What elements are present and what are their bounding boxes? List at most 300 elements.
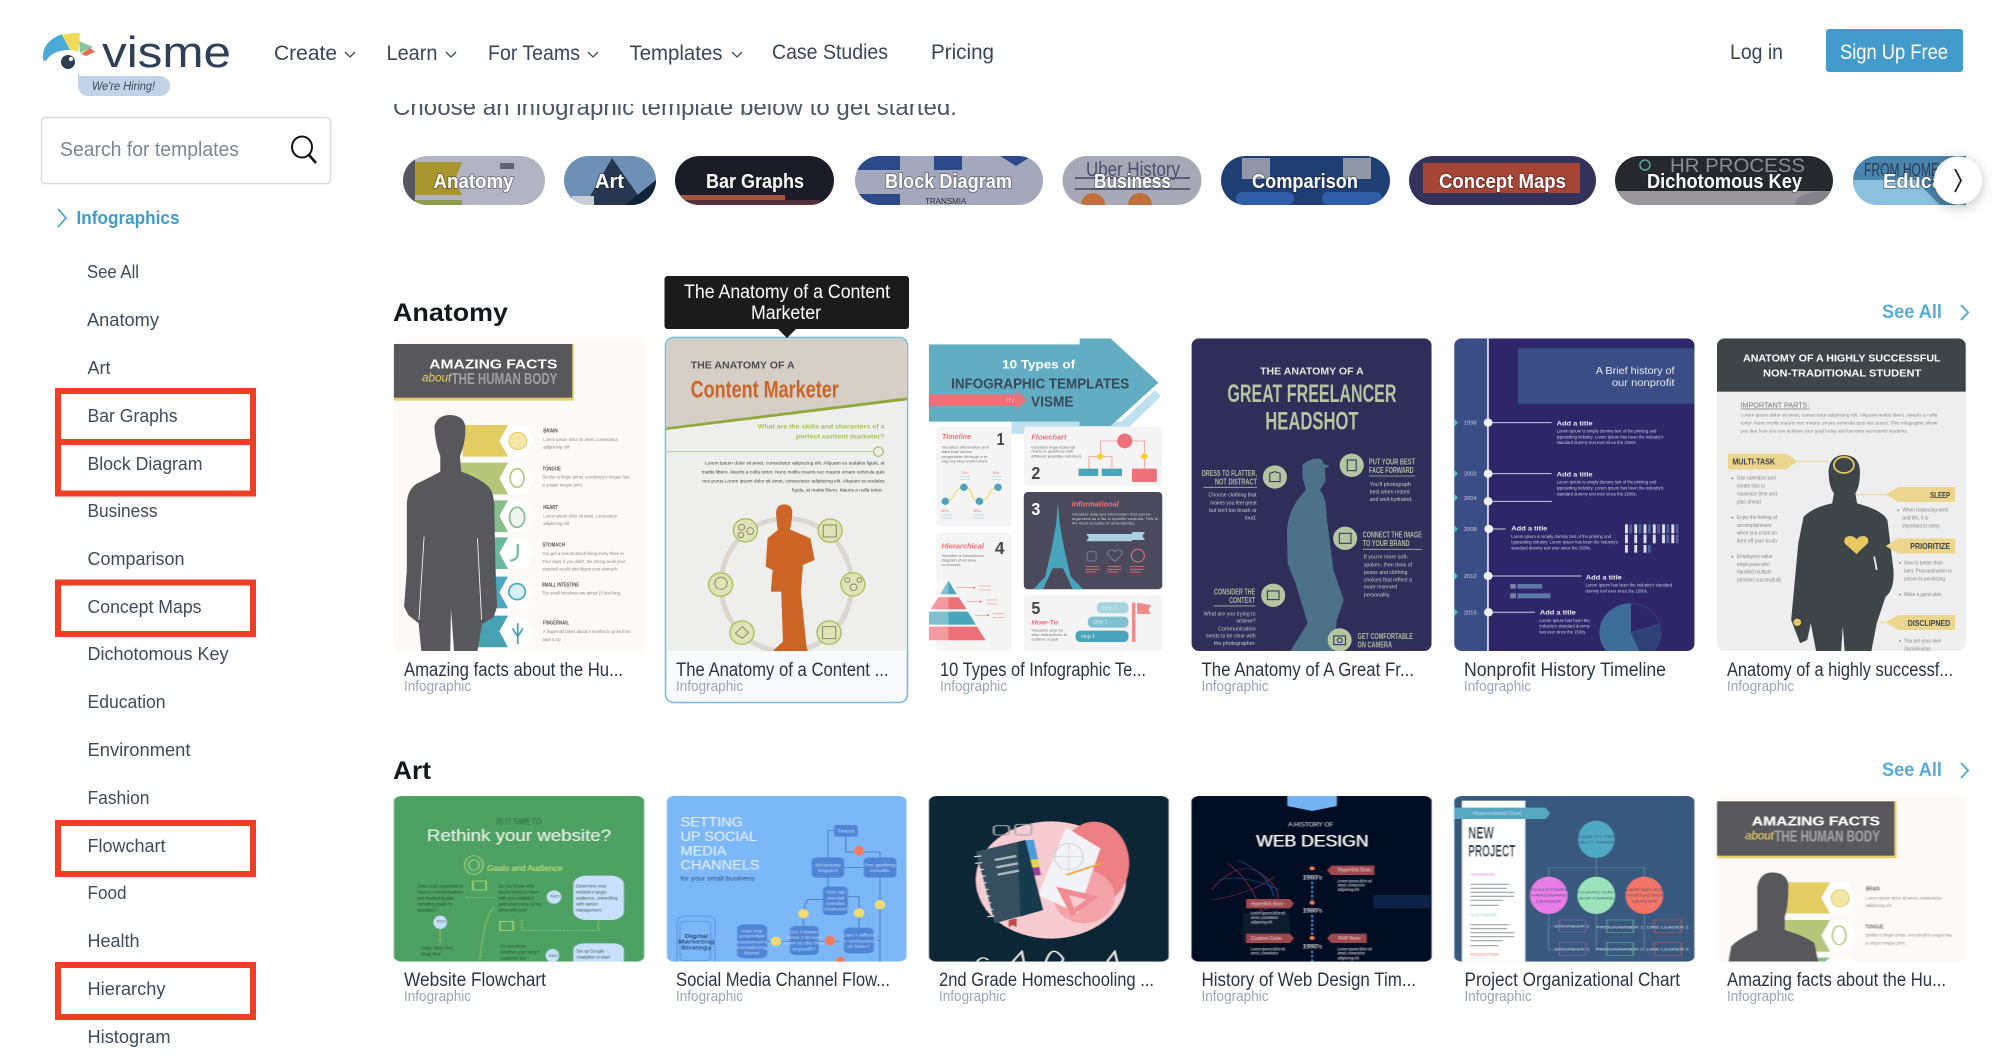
pill: comparison — [1221, 156, 1390, 205]
thumbnail: human body crop: adipiscing elit — [1866, 903, 1892, 909]
thumbnail: social media flowchart: CHANNELS — [681, 857, 760, 873]
tooltip — [664, 276, 909, 338]
template card: freelancer headshot — [1192, 338, 1432, 695]
thumbnail: web design: Lorem ipsum dolor sit — [1338, 879, 1372, 884]
template card: nonprofit timeline — [1454, 338, 1695, 695]
thumbnail: website flowchart: have a communications — [417, 890, 463, 895]
thumbnail: web design: amet, consetetur — [1251, 915, 1278, 921]
thumbnail: freelancer: CONTEXT — [1229, 596, 1255, 605]
thumbnail: student anatomy: Enjoy the feeling of — [1737, 515, 1777, 521]
caption: Website Flowchart — [404, 970, 547, 991]
thumbnail: 10 types: different possible solutions — [1031, 455, 1082, 459]
thumbnail: website flowchart — [394, 796, 644, 970]
thumbnail: human body: Similar to finger prints, everybody's tongue has — [543, 475, 630, 480]
thumbnail: student anatomy: create lists to — [1737, 484, 1765, 490]
pill: anatomy — [403, 156, 545, 205]
thumbnail: human body: TONGUE — [543, 467, 561, 473]
thumbnail: 10 types: VISME — [1031, 395, 1073, 411]
template card: web design timeline — [1191, 796, 1432, 1005]
thumbnail: student anatomy: priorities successfully. — [1737, 578, 1782, 584]
category pills — [403, 156, 1966, 205]
thumbnail: human body crop: THE HUMAN BODY — [1774, 829, 1880, 845]
thumbnail: human body: HEART — [543, 505, 559, 511]
thumbnail: human body crop: TONGUE — [1865, 925, 1884, 930]
caption: Infographic — [1727, 988, 1794, 1005]
thumbnail: web design: A HISTORY OF — [1288, 821, 1334, 828]
thumbnail: 10 types: Timeline — [942, 432, 971, 441]
thumbnail: 10 types: Visualize a hierarchical — [942, 554, 984, 558]
thumbnail: freelancer: poses and clothing — [1364, 570, 1408, 576]
thumbnail: freelancer: choices that reflect a — [1364, 577, 1412, 583]
logo: visme — [43, 28, 231, 96]
thumbnail: human body: base to tip. — [543, 637, 561, 642]
caption — [676, 970, 890, 1005]
pill: education (clipped): FROM HOME — [1864, 160, 1939, 180]
thumbnail: org chart: PROJECT MANAGER — [1565, 841, 1628, 845]
thumbnail: social media flowchart: potential — [739, 935, 764, 939]
thumbnail: student anatomy: tortor. Nunc mollis mauris nec mauris ornare vehicula quis nec purus. This infographic show — [1741, 421, 1938, 427]
thumbnail: website flowchart: you're trying to reach — [498, 890, 539, 895]
thumbnail: timeline: Add a title — [1586, 574, 1622, 581]
thumbnail: 10 types: Hierarchical — [942, 541, 985, 550]
thumbnail: timeline: 2012 — [1464, 574, 1477, 580]
thumbnail: org chart: PROGRAMMER 1 — [1596, 925, 1644, 930]
thumbnail: social media flowchart: time I know — [787, 936, 822, 941]
caption — [1202, 970, 1416, 1005]
thumbnail: student anatomy: when you cross an — [1737, 531, 1777, 537]
pill: concept maps — [1409, 156, 1596, 205]
thumbnail: social media flowchart: Digital — [685, 934, 708, 940]
thumbnail: human body: adipiscing elit — [543, 445, 570, 450]
thumbnail: student anatomy: maximize time and — [1737, 492, 1777, 498]
navigation bar: Pricing — [931, 41, 994, 64]
thumbnail: student anatomy: MULTI-TASK — [1732, 457, 1776, 467]
red highlight: concept maps — [58, 582, 253, 634]
thumbnail: student anatomy: DISCLIPNED — [1908, 618, 1951, 628]
thumbnail: org chart: NEW — [1468, 823, 1494, 842]
thumbnail: 10 types: 1 — [997, 429, 1005, 449]
thumbnail: human body: BRAIN — [543, 429, 558, 435]
thumbnail: web design: adipiscing elit. — [1338, 887, 1360, 893]
thumbnail: 10 types: Visualize data and information that can be — [1072, 512, 1151, 516]
thumbnail: website flowchart: show with you) — [498, 908, 527, 913]
thumbnail: 10 types: progression through a or — [942, 455, 989, 459]
thumbnail: website flowchart: management — [576, 909, 602, 913]
thumbnail: freelancer: DRESS TO FLATTER, — [1202, 469, 1257, 478]
sidebar category list: Business — [88, 501, 158, 521]
thumbnail: 10 types: 4 — [995, 538, 1005, 558]
thumbnail: web design: Hyperlink Born — [1338, 868, 1371, 873]
carousel next arrow — [1934, 156, 1982, 204]
thumbnail: 10 types: data that shows — [942, 450, 972, 454]
pill: dichotomous key: HR PROCESS — [1670, 156, 1805, 177]
thumbnail: freelancer: You'll photograph — [1370, 482, 1411, 488]
thumbnail: timeline: Lorem Ipsum is simply dummy text of the printing and — [1557, 428, 1657, 433]
thumbnail: timeline: standard dummy text ever since the 1500s. — [1557, 491, 1637, 496]
thumbnail: timeline — [1454, 338, 1695, 662]
thumbnail: timeline: 2008 — [1464, 527, 1477, 533]
sidebar category list: See All — [87, 262, 139, 282]
thumbnail: timeline: standard dummy text ever since the 1500s. — [1557, 440, 1637, 445]
caption — [676, 660, 888, 695]
thumbnail: timeline: text ever since the 1500s. — [1539, 629, 1587, 634]
thumbnail: web design: amet, consetetur — [1251, 951, 1278, 956]
thumbnail: 10 types: Informational — [1072, 500, 1120, 509]
thumbnail: social media flowchart: results — [870, 869, 890, 874]
thumbnail: social media flowchart: myself? — [793, 947, 815, 952]
thumbnail: content marketer: ligula, at mattis libero. Mauris a nulla tortor. — [792, 487, 883, 493]
thumbnail: 10 types: step-by-step instructions — [942, 460, 988, 464]
thumbnail: web design: 1980's — [1303, 907, 1323, 914]
thumbnail: timeline: typesetting industry. Lorem Ipsum has been the industry's — [1557, 434, 1664, 439]
thumbnail: org chart: RICHARD DAVIS — [1572, 891, 1621, 895]
caption: 2nd Grade Homeschooling ... — [939, 970, 1154, 991]
caption: Infographic — [1727, 678, 1794, 695]
subheading: choose a template: Choose an infographic template below to get started. — [393, 94, 957, 121]
thumbnail: website flowchart: Set up Google — [576, 949, 604, 954]
sidebar category list: Fashion — [88, 788, 150, 808]
template card: organizational chart — [1454, 796, 1694, 1005]
thumbnail: human body — [394, 338, 644, 651]
thumbnail: freelancer: and well-hydrated. — [1370, 497, 1413, 503]
thumbnail: timeline: typesetting industry. Lorem Ipsum has been the industry's — [1557, 486, 1664, 491]
pill: business: Business — [1094, 171, 1171, 193]
search box — [42, 118, 330, 184]
log in link: Log in — [1730, 41, 1783, 64]
thumbnail: website flowchart: and marketing plan, — [417, 896, 455, 901]
thumbnail: social media flowchart: Set up — [826, 891, 845, 895]
sidebar category list: Histogram — [88, 1027, 170, 1047]
navigation bar: For Teams — [488, 42, 580, 65]
thumbnail: web design: WEB DESIGN — [1256, 831, 1369, 850]
template card: homeschooling — [929, 796, 1169, 1005]
pill: block diagram — [855, 156, 1043, 206]
thumbnail: 10 types — [929, 338, 1162, 651]
thumbnail: content marketer — [666, 338, 907, 652]
thumbnail: freelancer: TO YOUR BRAND — [1363, 539, 1410, 548]
sidebar category list: Education — [88, 692, 166, 712]
thumbnail: social media flowchart: Tweet — [837, 830, 855, 834]
thumbnail: 10 types: INFOGRAPHIC TEMPLATES — [951, 377, 1129, 392]
thumbnail: website flowchart: Goals and Audience — [487, 865, 563, 873]
sidebar category list: Art — [88, 358, 110, 378]
tooltip: Marketer — [751, 303, 822, 324]
thumbnail: website flowchart: NO — [550, 894, 560, 899]
thumbnail: org chart: ENGINEER 2 — [1555, 948, 1590, 952]
caption: Amazing facts about the Hu... — [1727, 970, 1946, 991]
thumbnail: student anatomy: and life, it is — [1902, 516, 1929, 522]
thumbnail: student anatomy: NON-TRADITIONAL STUDENT — [1763, 369, 1922, 379]
thumbnail: human body crop: about — [1745, 829, 1774, 842]
thumbnail: student anatomy: disciplinarian. — [1904, 646, 1932, 652]
pill: art: Art — [595, 171, 624, 193]
thumbnail: website flowchart: websites? — [417, 908, 437, 913]
thumbnail: social media flowchart: socializing — [737, 946, 767, 951]
caption: Infographic — [404, 678, 471, 695]
thumbnail: website flowchart: IS IT TIME TO — [496, 817, 542, 827]
sidebar category list: Hierarchy — [88, 979, 166, 999]
thumbnail: human body: You get a new stomach lining every three to — [543, 551, 624, 556]
caption — [404, 660, 623, 695]
thumbnail: freelancer: needs to be clear with — [1206, 634, 1256, 640]
thumbnail: human body: THE HUMAN BODY — [452, 371, 558, 388]
pill: business — [1062, 156, 1202, 205]
thumbnail: website flowchart: with your website? — [498, 896, 535, 901]
thumbnail: 10 types: the most versatile of all templates. — [1072, 522, 1135, 526]
thumbnail: human body: Lorem ipsum dolor sit amet, consectetur — [543, 437, 618, 442]
thumbnail: freelancer: loud. — [1245, 515, 1257, 521]
pill: block diagram: TRANSMIA — [925, 197, 967, 206]
thumbnail: web design: PHP Born — [1338, 936, 1360, 942]
sidebar category list: Block Diagram — [88, 454, 202, 474]
sidebar category list — [58, 208, 228, 1047]
thumbnail: 10 types: step instructions to — [1031, 633, 1067, 637]
pill: concept maps: Concept Maps — [1439, 171, 1566, 193]
thumbnail: timeline: Add a title — [1511, 526, 1547, 533]
thumbnail: org chart: SOFTWARE — [1470, 914, 1498, 918]
caption: 10 Types of Infographic Te... — [940, 660, 1146, 681]
caption — [939, 970, 1154, 1005]
thumbnail: student anatomy: ANATOMY OF A HIGHLY SUCCESSFUL — [1743, 354, 1941, 364]
thumbnail: student anatomy — [1717, 338, 1966, 652]
thumbnail: website flowchart: Does your organization — [417, 884, 463, 889]
thumbnail: social media flowchart: Do I have — [790, 930, 818, 935]
caption: Amazing facts about the Hu... — [404, 660, 623, 681]
thumbnail: social media flowchart: channel — [824, 908, 847, 912]
caption — [1727, 660, 1953, 695]
caption: Infographic — [1202, 678, 1269, 695]
thumbnail: 10 types: step 1 — [1081, 634, 1095, 640]
pill: comparison: Comparison — [1252, 171, 1358, 193]
thumbnail: 10 types: Flowchart — [1031, 432, 1067, 441]
thumbnail: social media flowchart: Strategy — [681, 945, 712, 951]
thumbnail: org chart: PRODUCTION — [1623, 894, 1666, 898]
caption — [404, 970, 547, 1005]
sign up button: Sign Up Free — [1840, 41, 1948, 64]
thumbnail: social media flowchart: an outsource — [839, 939, 878, 944]
thumbnail: website flowchart: audience are — [500, 957, 526, 961]
thumbnail: freelancer: Choose clothing that — [1208, 493, 1257, 499]
thumbnail: timeline: our nonprofit — [1612, 378, 1675, 389]
pill: business: Uber History — [1086, 159, 1180, 181]
thumbnail: timeline: 2004 — [1464, 496, 1477, 502]
template card: website flowchart — [394, 796, 644, 1005]
navigation bar — [274, 41, 994, 65]
thumbnail: human body: Four days; if you didn't, the strong acids your — [543, 559, 626, 564]
caption: Infographic — [676, 678, 743, 695]
thumbnail: timeline: Lorem Ipsum is simply dummy text of the printing and — [1511, 534, 1612, 539]
thumbnail: 10 types: 5 — [1031, 598, 1041, 618]
thumbnail: timeline: Lorem Ipsum is simply dummy text of the printing and — [1557, 480, 1657, 485]
thumbnail: 10 types: 70's — [961, 471, 968, 475]
pill: block diagram: Block Diagram — [885, 171, 1012, 193]
pill: dichotomous key: Dichotomous Key — [1647, 171, 1803, 193]
thumbnail: freelancer: GET COMFORTABLE — [1358, 632, 1413, 641]
search box: Search for templates — [60, 139, 239, 161]
thumbnail: org chart: PRODUCTION — [1470, 953, 1499, 958]
navigation bar: Learn — [386, 42, 438, 65]
thumbnail: social media flowchart: Are my — [741, 929, 763, 934]
thumbnail: org chart: ENGINEER 1 — [1555, 925, 1590, 929]
thumbnail: website flowchart: Determine your — [576, 885, 607, 889]
thumbnail: freelancer — [1192, 338, 1432, 652]
thumbnail: social media flowchart — [667, 796, 907, 967]
sidebar category list: Dichotomous Key — [88, 644, 228, 664]
caption — [940, 660, 1146, 695]
caption: Infographic — [939, 988, 1006, 1005]
thumbnail: 10 types: achieve a goal — [1031, 638, 1058, 642]
thumbnail: org chart: Organizational Chart — [1472, 811, 1521, 817]
caption — [1464, 970, 1681, 1005]
thumbnail: web design: 1990's — [1303, 942, 1323, 950]
thumbnail: org chart: ELIZABETH PERRY — [1568, 835, 1626, 840]
thumbnail: content marketer: perfect content marketer? — [796, 434, 885, 441]
thumbnail: content marketer: nec purus.Lorem ipsum dolor sit amet, consectetur adipiscing elit. Aliquam eu sodales — [702, 478, 885, 484]
thumbnail: social media flowchart: for your small business — [681, 874, 754, 882]
sidebar category list: Food — [88, 883, 126, 903]
caption: Infographic — [1464, 678, 1531, 695]
thumbnail: human body crop: a unique tongue print. — [1865, 941, 1906, 946]
pill: dichotomous key — [1615, 156, 1833, 205]
thumbnail: content marketer: THE ANATOMY OF A — [691, 361, 795, 372]
caption: The Anatomy of a Content ... — [676, 660, 888, 681]
red highlight: hierarchy — [58, 965, 253, 1017]
thumbnail: student anatomy: important to sleep. — [1902, 523, 1941, 529]
thumbnail: 10 types: step 3 — [1102, 606, 1116, 612]
sidebar category list: Flowchart — [88, 836, 166, 856]
thumbnail: social media flowchart: Can I afford — [841, 934, 876, 938]
thumbnail: social media flowchart: or hire? — [847, 945, 870, 950]
thumbnail: social media flowchart: customers — [737, 940, 767, 945]
thumbnail: student anatomy: When balancing work — [1902, 508, 1949, 514]
thumbnail: org chart — [1454, 796, 1694, 962]
thumbnail: org chart: LINE LEADER 2 — [1647, 948, 1689, 952]
thumbnail: student anatomy: item off your to-do — [1737, 539, 1777, 545]
thumbnail: human body: A fingernail takes about 6 months to grow from — [543, 629, 631, 634]
thumbnail: human body: adipiscing elit — [543, 521, 570, 526]
thumbnail: 10 types: 60's — [942, 509, 948, 513]
caption: History of Web Design Tim... — [1202, 970, 1416, 991]
thumbnail: web design: 1960's — [1303, 873, 1323, 881]
heading: anatomy: Anatomy — [393, 299, 508, 327]
thumbnail: website flowchart: Okay, then First — [421, 946, 453, 951]
red highlight: bar graphs and block diagram — [58, 391, 253, 494]
caption: Infographic — [404, 988, 471, 1005]
thumbnail: org chart: PROGRAMMER 2 — [1596, 948, 1644, 952]
thumbnail: human body: The small intestines are about 23 feet long. — [542, 591, 621, 596]
thumbnail: 10 types: Visualize organizational — [1031, 445, 1075, 449]
caption: Project Organizational Chart — [1464, 970, 1681, 991]
thumbnail: social media flowchart: social — [827, 896, 844, 901]
thumbnail: website flowchart: (and does every up top — [498, 902, 542, 907]
thumbnail: freelancer: PUT YOUR BEST — [1369, 457, 1415, 466]
thumbnail: 10 types: diagram of an idea — [942, 558, 977, 562]
thumbnail: freelancer: personality. — [1364, 592, 1391, 598]
thumbnail: human body: a unique tongue print. — [543, 483, 583, 488]
caption: Infographic — [676, 988, 743, 1005]
heading: art: Art — [393, 757, 432, 785]
thumbnail: timeline: Add a title — [1557, 420, 1593, 427]
thumbnail: 10 types: IN — [1006, 397, 1015, 404]
pill: art — [564, 156, 656, 205]
thumbnail: student anatomy: poison to prioritizing. — [1904, 576, 1946, 582]
caption: Anatomy of a highly successf... — [1727, 660, 1953, 681]
thumbnail: social media flowchart: impact — [818, 869, 838, 874]
thumbnail: web design: adipiscing elit. — [1338, 956, 1360, 961]
thumbnail: website flowchart: whether your target — [500, 951, 539, 955]
thumbnail: timeline: Lorem Ipsum has been the industry's standard — [1585, 583, 1673, 588]
thumbnail: web design: Lorem ipsum dolor sit — [1338, 947, 1372, 952]
thumbnail: social media flowchart: Marketing — [678, 940, 714, 945]
thumbnail: timeline: industry's standard dummy — [1539, 624, 1590, 629]
thumbnail: 10 types: 10 Types of — [1002, 358, 1076, 371]
sidebar category list: Health — [88, 931, 140, 951]
thumbnail: freelancer: GREAT FREELANCER — [1227, 380, 1396, 408]
thumbnail: social media flowchart: I'm getting — [865, 863, 895, 868]
thumbnail: student anatomy: accomplishment — [1737, 523, 1772, 529]
thumbnail: 10 types: 2 — [1031, 463, 1041, 483]
thumbnail: content marketer: What are the skills and characters of a — [758, 424, 885, 431]
pill: education (clipped): Educa — [1883, 171, 1944, 193]
thumbnail: web design: Lorem ipsum dolor sit — [1251, 911, 1285, 916]
thumbnail: freelancer: If you're more soft- — [1364, 555, 1408, 561]
thumbnail: student anatomy: employees who — [1737, 562, 1770, 568]
see all link: art: See All — [1882, 760, 1942, 781]
thumbnail: 10 types: How-To — [1031, 620, 1058, 627]
thumbnail: student anatomy: Employers value — [1737, 554, 1773, 560]
thumbnail: web design: Lorem ipsum dolor sit — [1251, 947, 1285, 952]
thumbnail: website flowchart: Rethink your website? — [427, 826, 611, 845]
thumbnail: 10 types: or concept — [942, 563, 960, 567]
thumbnail: student anatomy: Lorem ipsum dolor sit amet, consectetur adipiscing elit. Aliquam mattis libero. Mauris a nulla — [1741, 413, 1938, 419]
thumbnail: human body: STOMACH — [543, 543, 565, 549]
thumbnail: org chart: HARDWARE — [1531, 894, 1567, 898]
thumbnail: freelancer: but isn't too brash or — [1209, 508, 1257, 514]
thumbnail: timeline: 1998 — [1464, 420, 1477, 426]
thumbnail: social media flowchart: media — [827, 902, 846, 907]
thumbnail: human body crop — [1717, 796, 1966, 962]
thumbnail: homeschooling — [929, 796, 1169, 962]
thumbnail: student anatomy: PRIORITIZE — [1910, 541, 1950, 551]
template card: amazing facts repeat — [1717, 796, 1966, 1005]
template card: successful student — [1717, 338, 1966, 695]
see all link: anatomy: See All — [1882, 302, 1942, 323]
thumbnail: org chart: BLAIR NELSON — [1622, 888, 1667, 893]
thumbnail: student anatomy: plan ahead — [1737, 499, 1761, 505]
thumbnail: freelancer: makes you feel great — [1210, 500, 1257, 506]
thumbnail: web design: Custom Code — [1251, 936, 1282, 942]
thumbnail: human body crop: BRAIN — [1866, 887, 1880, 892]
thumbnail: org chart: LINE LEADER 1 — [1647, 925, 1689, 930]
thumbnail: 10 types: organized as a list or specific sections. This is — [1072, 517, 1158, 521]
logo: visme: visme — [102, 28, 231, 77]
thumbnail: human body: SMALL INTESTINE — [542, 582, 579, 588]
sign up button — [1826, 29, 1963, 72]
red highlight: flowchart — [58, 823, 253, 874]
caption: Infographic — [1464, 988, 1532, 1005]
thumbnail: org chart: HARDWARE — [1470, 873, 1495, 878]
thumbnail: freelancer: THE ANATOMY OF A — [1260, 366, 1364, 377]
thumbnail: human body: about — [422, 371, 452, 385]
thumbnail: content marketer: mattis libero. Mauris a nulla tortor. Nunc mollis mauris nec mauris ornare vehicula quis — [702, 469, 885, 475]
thumbnail: social media flowchart: Measure — [815, 863, 841, 868]
caption: Nonprofit History Timeline — [1464, 660, 1666, 681]
thumbnail: 10 types: 90's — [992, 471, 999, 475]
caption: Infographic — [940, 678, 1007, 695]
thumbnail: freelancer: CONSIDER THE — [1214, 587, 1256, 596]
thumbnail: org chart: LEADER — [1536, 899, 1562, 904]
thumbnail: timeline: Add a title — [1557, 472, 1593, 479]
